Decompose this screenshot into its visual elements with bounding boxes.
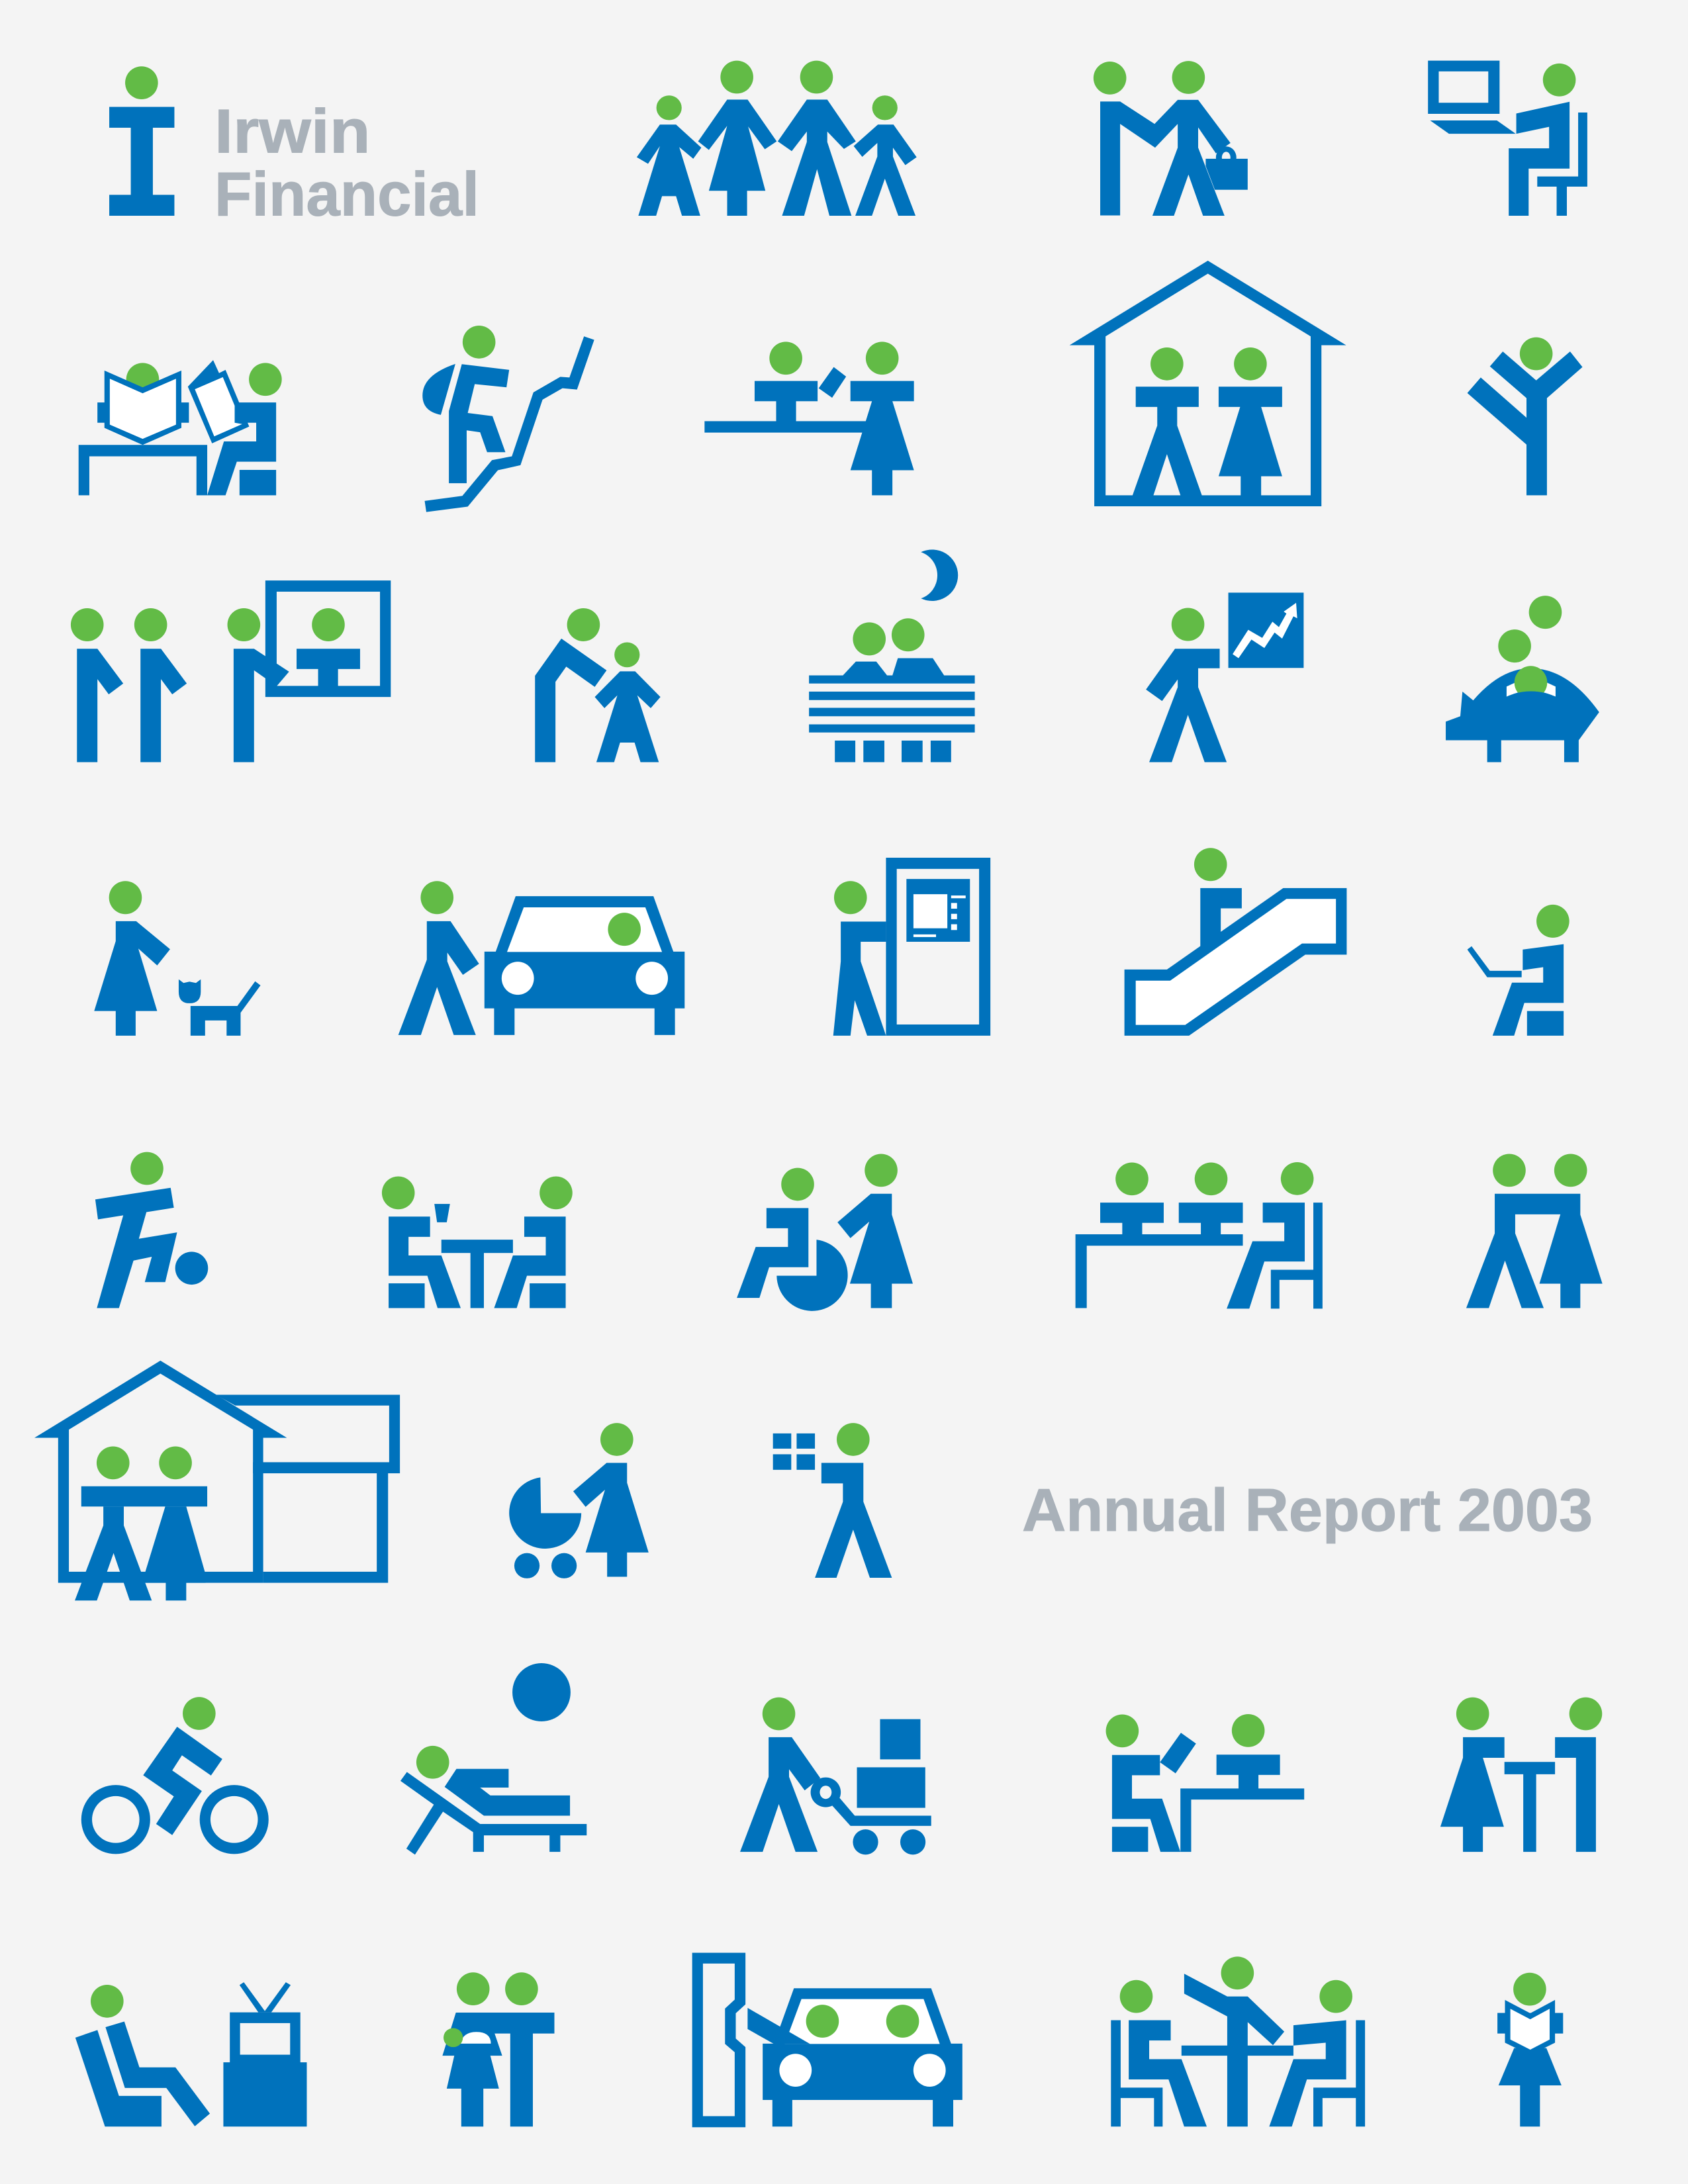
icon: person with raised arms [1468,338,1583,495]
icon: person at ATM [833,858,990,1036]
icon: person pushing shopping cart [740,1698,931,1854]
icon: three people meeting at table [1111,1956,1365,2126]
icon: couple holding baby [442,1972,554,2126]
icon: couple in car at garage door [692,1953,962,2127]
heading: company name: Financial [214,159,479,229]
icon: woman and man at small table [1440,1698,1602,1852]
icon: two people at desk with document [1106,1714,1304,1852]
heading: company name: Irwin [214,97,371,165]
icon: two people seated at table [382,1176,573,1308]
icon: teller and customer at counter [704,341,914,495]
icon: person on escalator [1125,848,1346,1036]
icon: couple with house and garage [34,1361,400,1600]
icon: piggy bank with coins [1446,596,1599,762]
icon: two people with briefcase [1094,61,1248,216]
icon: person in armchair watching TV [75,1982,306,2126]
icon: couple joined arm in arm [1466,1154,1603,1308]
icon: adult and child [535,608,661,762]
icon: two people reading at desk [79,360,282,495]
heading: Annual Report 2003: Annual Report 2003 [1022,1477,1593,1544]
icon: couple in bed under moon [809,549,975,762]
icon: couple in house [1070,261,1346,506]
icon: three people and portrait frame [71,580,391,762]
icon: three people at a desk [1076,1162,1323,1308]
icon: person beside car with driver [399,881,684,1035]
heading: company name [214,97,479,229]
icon: seated person with laptop [1468,905,1570,1036]
icon: person kicking ball [95,1152,208,1308]
icon: family of four [637,61,917,216]
icon: person climbing rising line [422,326,594,512]
icon: person at computer [1428,61,1587,216]
icon: person on bicycle [81,1697,269,1854]
icon: woman reading book [1497,1973,1563,2126]
logo: Irwin Financial I mark [109,66,174,216]
icon: woman walking cat [94,881,261,1036]
icon: wheelchair user with companion [737,1154,913,1311]
icon: woman with stroller [509,1423,649,1578]
icon: person on lounge chair under sun [400,1663,586,1854]
icon: person with growth chart [1146,593,1303,762]
icon: person with window blocks [773,1423,892,1578]
